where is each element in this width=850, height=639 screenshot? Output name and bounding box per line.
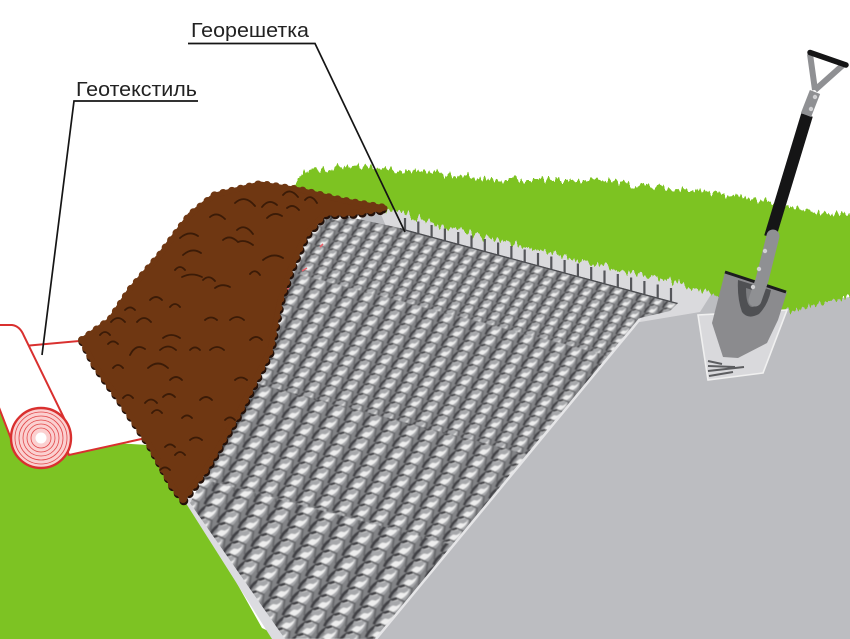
- back grass: [284, 166, 850, 312]
- label: geotextile: [42, 79, 198, 355]
- soil texture arcs: [100, 191, 317, 470]
- shaft: [770, 115, 807, 237]
- light strip beside mesh: [182, 497, 292, 639]
- label: geogrid: Георешетка: [191, 20, 310, 42]
- red marks on mesh: [285, 244, 323, 291]
- blade step bar: [725, 272, 786, 292]
- mesh light edge: [376, 319, 640, 639]
- geotextile sheet: [24, 340, 155, 455]
- roll body: [0, 325, 64, 444]
- grey ground: [300, 200, 850, 639]
- soil pile: [82, 184, 386, 501]
- lower socket with rivets: [755, 236, 773, 300]
- grip: [810, 52, 846, 65]
- geotextile roll: [0, 325, 155, 468]
- geogrid mesh: [190, 216, 678, 639]
- geogrid spikes: [405, 218, 671, 302]
- excavated trench: [698, 310, 787, 380]
- upper socket and Y handle: [806, 92, 815, 115]
- shovel: [712, 52, 846, 358]
- label: geogrid: [188, 20, 405, 232]
- shovel blade: [712, 272, 787, 358]
- buried geogrid end: [708, 361, 744, 376]
- roll end with rings: [11, 408, 71, 468]
- label: geotextile: Геотекстиль: [76, 79, 197, 101]
- front left grass: [0, 410, 285, 639]
